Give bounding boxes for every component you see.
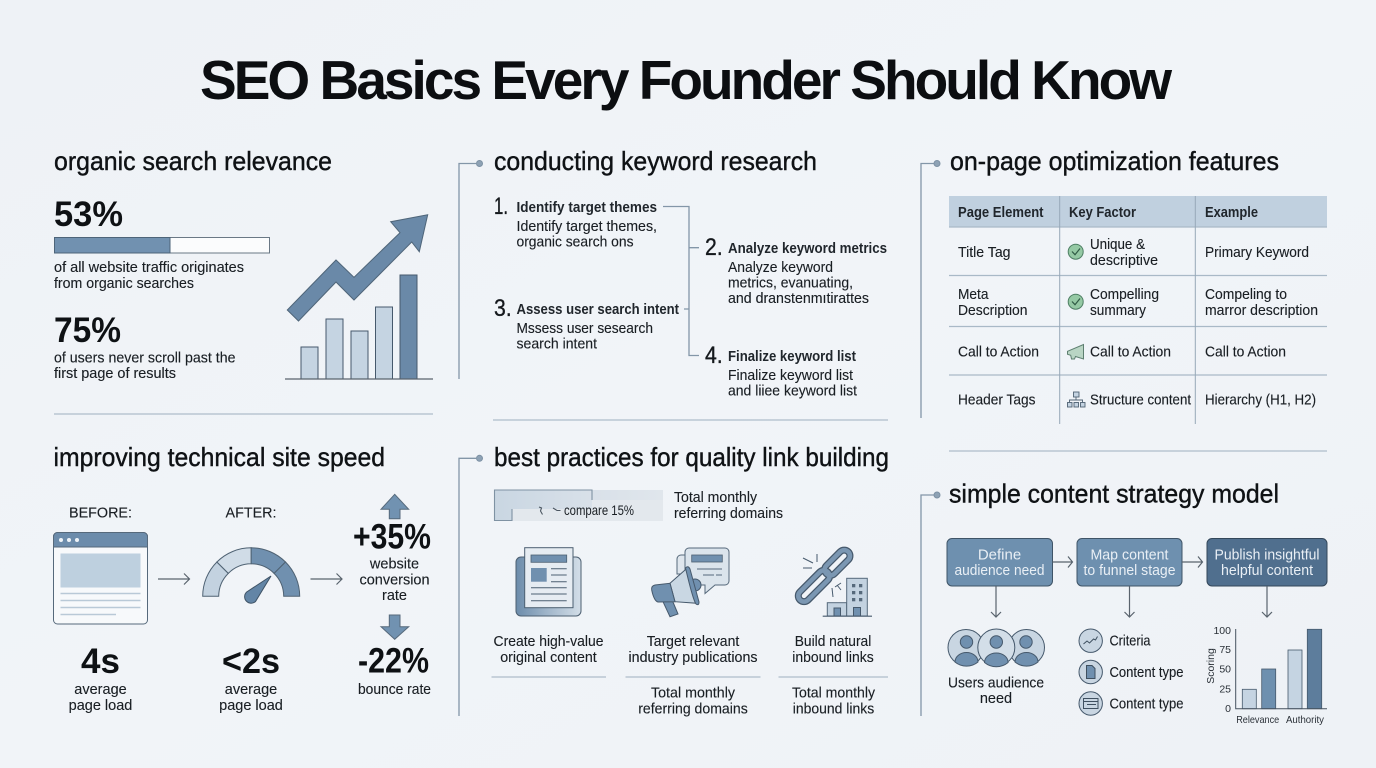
text: users audience need [948, 675, 1044, 707]
table header row: Example [1205, 205, 1258, 221]
text: total monthly referring domains [674, 490, 783, 522]
x axis labels [1236, 714, 1325, 726]
panel: simple content strategy model [921, 478, 1327, 726]
arrow: before to after [158, 574, 190, 584]
table row: title tag: Primary Keyword [1205, 245, 1309, 261]
step 1: 1. [494, 193, 508, 220]
y axis title: Scoring [1205, 648, 1217, 684]
text: total inbound links: Total monthly [792, 686, 876, 702]
label: after: AFTER: [226, 506, 276, 522]
arrow: define to map [1052, 556, 1072, 568]
y axis labels: 50 [1219, 664, 1231, 676]
stat: 75%: 75% [54, 311, 121, 350]
step 4: and liiee keyword list [728, 384, 857, 400]
icon: browser window [54, 532, 148, 624]
text: total inbound links [792, 686, 876, 718]
heading: improving technical site speed: improving technical site speed [54, 442, 385, 472]
icon: newspaper [516, 548, 581, 616]
label: before: BEFORE: [69, 506, 132, 522]
icon: users group [948, 629, 1044, 667]
text: traffic description: of all website traffic originates [54, 260, 244, 276]
step 2 [705, 234, 887, 307]
table row: meta description: Description [958, 303, 1028, 319]
table row: header tags: Header Tags [958, 392, 1036, 408]
stat: <2s: <2s [222, 642, 280, 681]
y axis labels [1213, 625, 1231, 715]
text: total referring domains [638, 686, 748, 718]
heading: simple content strategy model: simple content strategy model [949, 478, 1279, 508]
panel: improving technical site speed [54, 442, 431, 714]
text: after page load: page load [219, 698, 283, 714]
stat: +35%: +35% [353, 517, 431, 556]
table header row: Page Element [958, 205, 1044, 221]
text: after page load [219, 682, 283, 714]
flow box: map content [1077, 538, 1182, 586]
step 3: search intent [516, 336, 597, 352]
icon: down arrow [381, 615, 409, 639]
connector: panel bracket [921, 492, 940, 716]
stat: 4s: 4s [81, 642, 120, 681]
connector: panel bracket [459, 455, 482, 716]
list item: content type layout: Content type [1110, 696, 1184, 712]
text: traffic description [54, 260, 244, 292]
table row: meta description: Compeling to [1205, 287, 1287, 303]
text: build links: inbound links [792, 650, 874, 666]
y axis labels: 25 [1219, 684, 1231, 696]
panel: on-page optimization features [921, 146, 1327, 424]
step connector lines [663, 206, 699, 356]
step 3: Assess user search intent [516, 302, 679, 318]
text: scroll description: of users never scroll past the [54, 350, 236, 366]
table row: call to action: Call to Action [1205, 344, 1286, 360]
x axis labels: Relevance [1236, 714, 1279, 726]
panel: best practices for quality link building [459, 442, 889, 718]
table row: meta description: marror description [1205, 303, 1318, 319]
step 1: Identify target themes, [516, 219, 657, 235]
text: total referring domains: Total monthly [651, 686, 736, 702]
arrow: define down [991, 586, 1001, 617]
y axis labels: 75 [1219, 644, 1231, 656]
y axis labels: 100 [1213, 625, 1231, 637]
text: build links [792, 634, 874, 666]
arrow: after to results [310, 574, 342, 584]
step 1: Identify target themes [516, 200, 657, 216]
table row: meta description: Compelling [1090, 287, 1159, 303]
text: conversion rate: website [369, 556, 419, 572]
flow box: define audience need: Define [978, 546, 1021, 563]
table header row [958, 205, 1258, 221]
text: users audience need: need [980, 691, 1012, 707]
list item: content type document [1079, 660, 1184, 684]
table row: header tags: Hierarchy (H1, H2) [1205, 392, 1316, 408]
text: conversion rate: rate [382, 588, 407, 604]
list item: criteria: Criteria [1110, 634, 1151, 650]
flow box: publish content [1207, 538, 1327, 586]
text: bounce rate: bounce rate [358, 682, 431, 698]
comparison bar: compare 15% [564, 502, 634, 518]
table row: title tag: descriptive [1090, 253, 1158, 269]
bar chart: scoring [1205, 625, 1327, 726]
text: create content: original content [500, 650, 597, 666]
text: before page load [69, 682, 132, 714]
table row: call to action: Call to Action [1090, 344, 1171, 360]
table row: call to action [958, 344, 1286, 360]
text: create content: Create high-value [494, 634, 604, 650]
step 2: 2. [705, 234, 723, 261]
text: conversion rate [359, 556, 430, 604]
connector: panel bracket [921, 160, 940, 418]
table row: meta description [958, 287, 1318, 319]
title: SEO Basics Every Founder Should Know [200, 49, 1172, 111]
step 4: Finalize keyword list [728, 349, 856, 365]
step 3: Mssess user sesearch [516, 321, 653, 337]
text: after page load: average [225, 682, 277, 698]
progress bar: 53% [54, 238, 270, 253]
text: create content [494, 634, 604, 666]
heading: best practices for quality link building: best practices for quality link building [494, 442, 889, 472]
text: traffic description: from organic searches [54, 276, 194, 292]
step 4 [705, 342, 857, 400]
step 3: 3. [494, 295, 512, 322]
connector: panel bracket [459, 160, 482, 379]
text: target publications: industry publications [628, 650, 758, 666]
panel: organic search relevance [54, 146, 433, 382]
table row: title tag [958, 237, 1309, 269]
table row: title tag: Title Tag [958, 245, 1010, 261]
step 2: metrics, evanuating, [728, 276, 853, 292]
text: conversion rate: conversion [359, 572, 430, 588]
text: total monthly referring domains: referring domains [674, 506, 783, 522]
table row: title tag: Unique & [1090, 237, 1145, 253]
step 1: organic search ons [516, 234, 634, 250]
flow box: define audience need [947, 538, 1052, 586]
list item: content type document: Content type [1110, 665, 1184, 681]
text: target publications [628, 634, 758, 666]
step 2: Analyze keyword metrics [728, 241, 887, 257]
step 2: and dranstenmıtirattes [728, 291, 869, 307]
step 1 [494, 193, 657, 250]
text: total monthly referring domains: Total monthly [674, 490, 758, 506]
step 4: Finalize keyword list [728, 368, 853, 384]
text: users audience need: Users audience [948, 675, 1044, 691]
text: build links: Build natural [795, 634, 871, 650]
comparison bar [494, 490, 663, 521]
text: total inbound links: inbound links [793, 702, 874, 718]
table row: header tags: Structure content [1090, 392, 1191, 408]
heading: organic search relevance: organic search relevance [54, 146, 332, 176]
arrow: publish down [1262, 586, 1272, 617]
table header row: Key Factor [1069, 205, 1136, 221]
x axis labels: Authority [1286, 714, 1325, 726]
flow box: define audience need: audience need [954, 562, 1044, 579]
table row: meta description: summary [1090, 303, 1147, 319]
step 3 [494, 295, 679, 352]
arrow: map to publish [1182, 556, 1202, 568]
arrow: map down [1124, 586, 1134, 617]
icon: megaphone with speech bubble [652, 548, 729, 617]
y axis labels: 0 [1225, 703, 1231, 715]
icon: broken chain and building [796, 548, 872, 616]
text: before page load: page load [69, 698, 132, 714]
chart: rising bars with arrow [285, 215, 433, 379]
list item: criteria [1079, 629, 1151, 652]
flow box: map content: to funnel stage [1084, 562, 1176, 579]
text: total referring domains: referring domains [638, 702, 748, 718]
flow box: map content: Map content [1090, 546, 1169, 563]
flow box: publish content: Publish insightful [1214, 546, 1320, 563]
text: scroll description [54, 350, 236, 382]
step 4: 4. [705, 342, 723, 369]
text: target publications: Target relevant [647, 634, 739, 650]
panel: conducting keyword research [459, 146, 887, 400]
text: before page load: average [74, 682, 127, 698]
table row: header tags [958, 392, 1316, 408]
flow box: publish content: helpful content [1221, 562, 1314, 579]
heading: on-page optimization features: on-page optimization features [950, 146, 1279, 176]
table row: call to action: Call to Action [958, 344, 1039, 360]
stat: 53%: 53% [54, 195, 123, 234]
step 2: Analyze keyword [728, 260, 833, 276]
icon: up arrow [381, 494, 409, 519]
stat: -22%: -22% [358, 642, 429, 681]
text: scroll description: first page of results [54, 366, 176, 382]
heading: conducting keyword research: conducting keyword research [494, 146, 817, 176]
icon: speed gauge [203, 548, 300, 603]
table [949, 196, 1327, 424]
table row: meta description: Meta [958, 287, 989, 303]
list item: content type layout [1079, 692, 1184, 715]
